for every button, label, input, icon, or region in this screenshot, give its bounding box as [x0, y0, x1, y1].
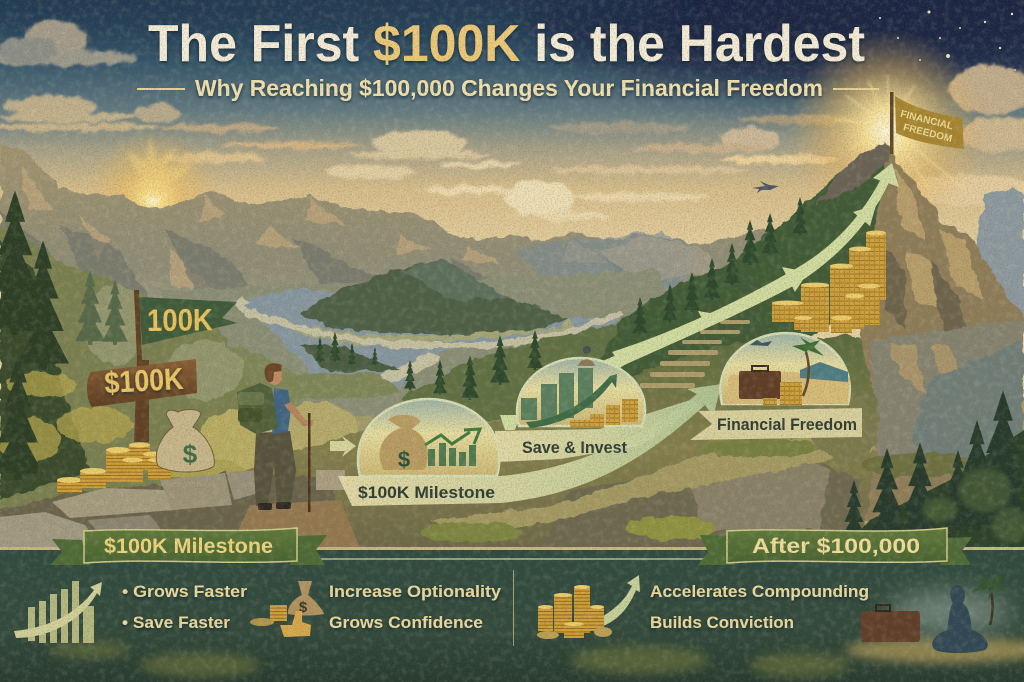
green pennant: 100K — [139, 297, 237, 345]
arm — [284, 402, 313, 426]
airplane — [752, 181, 779, 193]
subtitle rule left — [137, 88, 185, 90]
cliffs and foliage — [420, 395, 980, 545]
right foreground trees — [840, 390, 1024, 552]
meditating figure — [932, 585, 988, 653]
ribbon text — [358, 415, 857, 502]
text: Accelerates Compounding: Accelerates Compounding — [650, 582, 869, 601]
foreground ground — [0, 335, 880, 560]
money bag left — [156, 409, 214, 472]
post and sign: $100K — [87, 290, 237, 442]
bottom panel — [0, 528, 1024, 682]
scene: meditation on beach — [845, 574, 1024, 663]
banner right — [698, 528, 972, 565]
icon: bag, coins and thumb — [250, 581, 324, 637]
oval vignette: $100K Milestone: $ — [398, 447, 410, 472]
trekking pole — [308, 413, 310, 512]
summit flag: Financial Freedom: FINANCIAL — [899, 109, 954, 132]
left forest — [0, 225, 282, 520]
backpack — [237, 383, 278, 434]
green pennant: 100K: 100K — [147, 302, 214, 338]
legs — [254, 431, 296, 506]
sun glow right with rays — [788, 30, 988, 230]
summit flag: Financial Freedom: FREEDOM — [902, 122, 953, 145]
oval vignette: $100K Milestone — [358, 399, 499, 476]
valley with river and central hill — [160, 258, 680, 458]
summit flag: Financial Freedom — [890, 92, 964, 154]
ribbon: Financial Freedom — [690, 408, 862, 440]
distant mountain range — [0, 145, 1024, 340]
label: Financial Freedom: Financial Freedom — [717, 415, 857, 434]
flag pole — [134, 290, 149, 442]
icon: growth chart — [14, 581, 102, 643]
stone wall with hiker ledge — [0, 470, 360, 548]
oval vignette: Financial Freedom — [720, 333, 850, 405]
panel background — [0, 548, 1024, 682]
bullet: Grows Faster: • Grows Faster — [122, 582, 247, 601]
title: The First $100K is the Hardest — [148, 15, 865, 73]
big ribbon arrow: $100K Milestone — [338, 384, 722, 506]
torso — [272, 388, 291, 434]
subtitle: Why Reaching $100,000 Changes Your Financial Freedom — [195, 75, 823, 101]
bullets — [122, 582, 869, 632]
label: Save & Invest: Save & Invest — [522, 438, 627, 457]
lead-in arrow — [330, 436, 356, 457]
banner left — [50, 528, 327, 565]
divider — [513, 570, 514, 646]
subtitle rule right — [833, 88, 879, 90]
left pine trees — [0, 190, 69, 480]
palm tree — [990, 588, 993, 625]
right mountain with summit — [560, 142, 1024, 520]
text: Builds Conviction: Builds Conviction — [650, 613, 794, 632]
head — [264, 363, 282, 385]
stars — [879, 10, 1016, 73]
bullet: Save Faster: • Save Faster — [122, 613, 230, 632]
foliage highlights — [50, 642, 850, 677]
banner left: $100K Milestone — [104, 535, 273, 558]
icon: coins with arrow — [537, 575, 640, 639]
hiker — [237, 363, 313, 512]
gold coin stacks on mountain — [772, 230, 886, 333]
wooden sign: $100K: $100K — [104, 361, 185, 400]
trees on mountain slope — [315, 197, 808, 400]
rising arrow to the summit — [500, 163, 899, 430]
text: Increase Optionality: Increase Optionality — [329, 582, 502, 601]
sun glow left — [83, 130, 223, 270]
gold rule — [0, 547, 1024, 550]
text: Grows Confidence: Grows Confidence — [329, 613, 483, 632]
banner right: After $100,000 — [752, 535, 920, 558]
staircase path — [640, 320, 750, 388]
ribbon: Save & Invest — [495, 400, 700, 462]
icon: bag, coins and thumb: $ — [299, 599, 308, 616]
suitcase — [861, 611, 920, 642]
label: $100K Milestone: $100K Milestone — [358, 483, 495, 502]
gold coin stacks left — [57, 442, 171, 493]
oval vignette: Save & Invest — [517, 346, 645, 428]
background: clouds — [0, 20, 1024, 221]
money bag left: $ — [183, 439, 198, 469]
